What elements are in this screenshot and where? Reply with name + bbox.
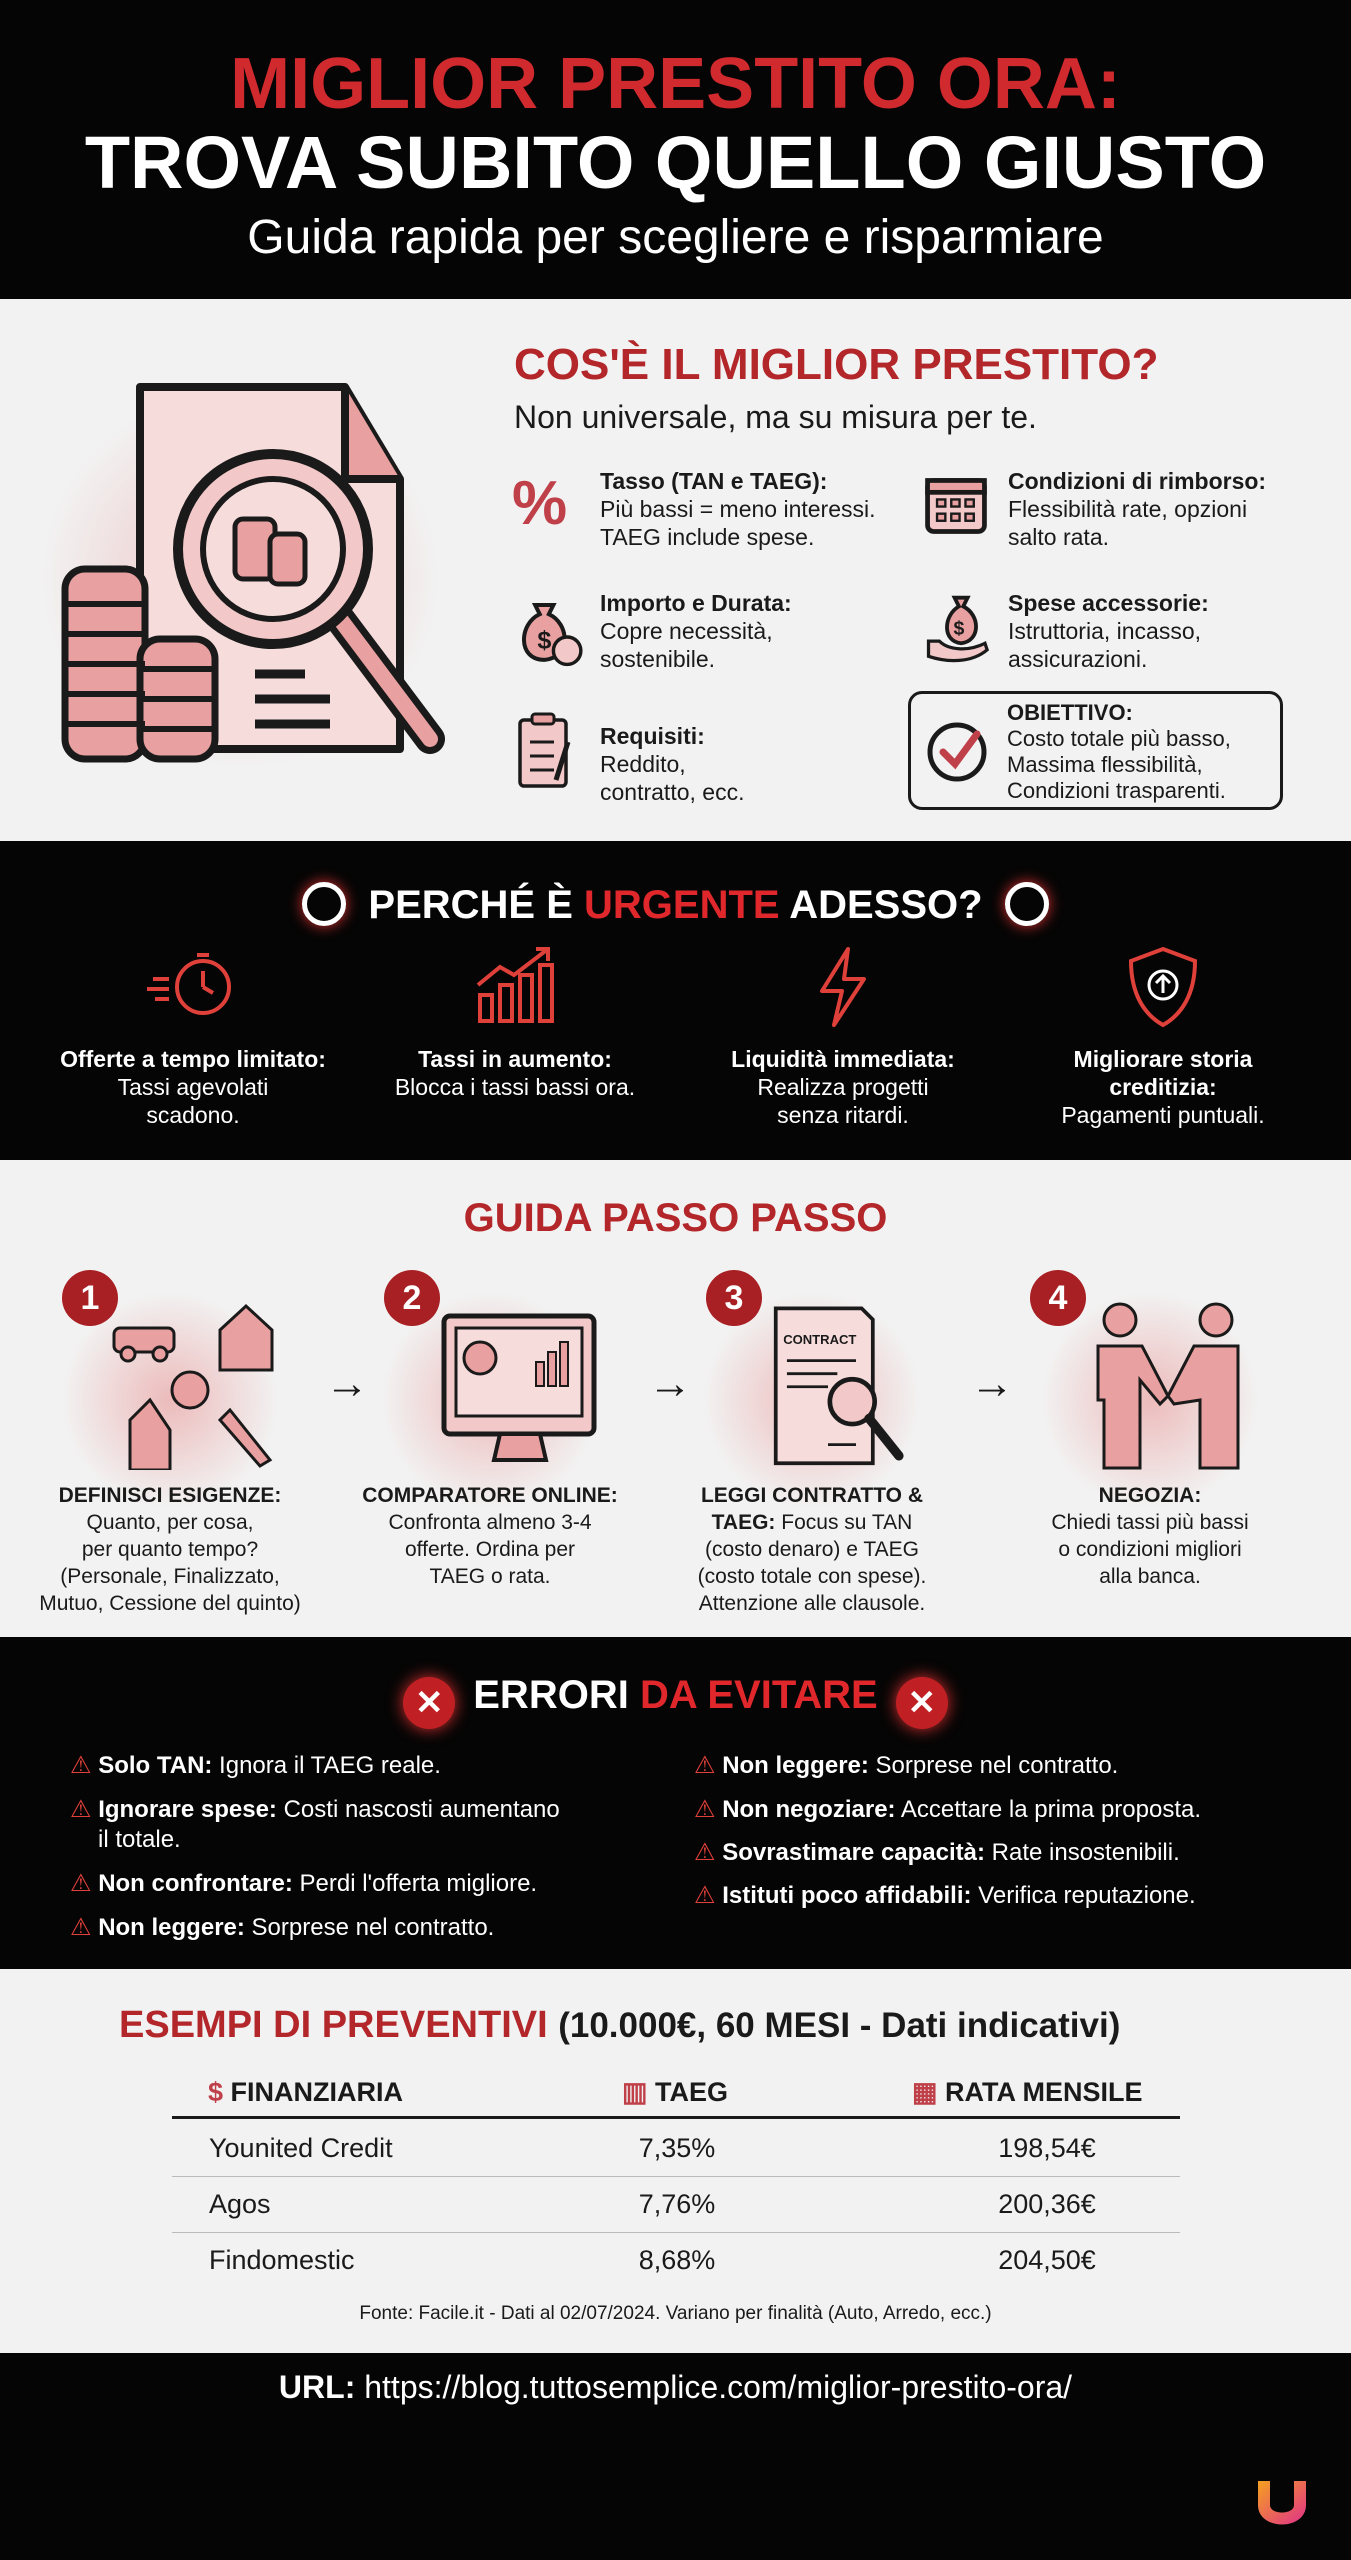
callout: obiettivo — [908, 691, 1283, 810]
step 2: offerte. Ordina per — [405, 1538, 575, 1561]
icon: money bag — [522, 603, 583, 666]
row: agos — [172, 2177, 1180, 2233]
step 2 — [362, 1270, 618, 1588]
step 2: TAEG o rata. — [430, 1565, 550, 1588]
item: condizioni di rimborso: Condizioni di rimborso: — [1008, 468, 1266, 494]
item: tassi in aumento: Blocca i tassi bassi ora. — [395, 1074, 635, 1100]
list: right column: ⚠ Istituti poco affidabili: Verifica reputazione. — [694, 1882, 1196, 1909]
step 3: (costo denaro) e TAEG — [705, 1538, 919, 1561]
list: right column: ⚠ Non leggere: Sorprese nel contratto. — [694, 1752, 1118, 1779]
step 4: Chiedi tassi più bassi — [1051, 1511, 1249, 1534]
callout: obiettivo: OBIETTIVO: — [1007, 700, 1133, 725]
table header — [172, 2069, 1180, 2119]
table header: $ FINANZIARIA — [208, 2077, 403, 2107]
item: spese accessorie: Istruttoria, incasso, — [1008, 618, 1201, 644]
callout: obiettivo: Massima flessibilità, — [1007, 752, 1203, 777]
heading with timer icons: PERCHÉ È URGENTE ADESSO? — [368, 883, 983, 927]
step 4: NEGOZIA: — [1099, 1484, 1201, 1507]
icon: calendar — [925, 478, 987, 534]
callout: obiettivo: Condizioni trasparenti. — [1007, 778, 1226, 803]
item: offerte a tempo limitato — [60, 953, 326, 1128]
step 1: per quanto tempo? — [82, 1538, 258, 1561]
icon: contract with magnifier — [774, 1306, 904, 1466]
icon: car house plane gear — [112, 1304, 274, 1470]
step 2: COMPARATORE ONLINE: — [362, 1484, 618, 1507]
subtitle: Guida rapida per scegliere e risparmiare — [247, 211, 1104, 264]
number badge 1: 1 — [81, 1279, 99, 1317]
number badge 1 — [62, 1270, 118, 1326]
row: younited: 7,35% — [639, 2133, 715, 2163]
list: right column — [694, 1752, 1201, 1909]
number badge 4: 4 — [1049, 1279, 1067, 1317]
item: liquidità immediata: Liquidità immediata: — [731, 1046, 955, 1072]
item: condizioni di rimborso: Flessibilità rate, opzioni — [1008, 496, 1247, 522]
step 3: TAEG: Focus su TAN — [712, 1511, 912, 1534]
item: importo e durata — [522, 590, 792, 672]
arrow 2: → — [648, 1359, 692, 1408]
table header: ▥ TAEG — [622, 2077, 728, 2107]
icon: percent: % — [512, 469, 567, 538]
list: left column: ⚠ Solo TAN: Ignora il TAEG reale. — [70, 1752, 441, 1779]
item: tasso — [512, 468, 876, 550]
item: requisiti: contratto, ecc. — [600, 779, 744, 805]
icon: monitor — [442, 1314, 596, 1462]
list: right column: ⚠ Sovrastimare capacità: Rate insostenibili. — [694, 1839, 1180, 1866]
item: tassi in aumento: Tassi in aumento: — [418, 1046, 612, 1072]
panel: perché è urgente — [0, 841, 1351, 1160]
number badge 3: 3 — [725, 1279, 743, 1317]
item: spese accessorie: assicurazioni. — [1008, 646, 1147, 672]
row: agos: 200,36€ — [998, 2189, 1096, 2219]
list: right column: ⚠ Non negoziare: Accettare la prima proposta. — [694, 1796, 1201, 1823]
footer: url — [0, 2353, 1351, 2560]
item: condizioni di rimborso: salto rata. — [1008, 524, 1109, 550]
heading: COS'È IL MIGLIOR PRESTITO? — [514, 340, 1158, 389]
icon: handshake people — [1096, 1302, 1240, 1470]
step 3: Attenzione alle clausole. — [699, 1592, 925, 1615]
row: younited: Younited Credit — [209, 2133, 393, 2163]
item: spese accessorie — [926, 590, 1209, 672]
item: offerte a tempo limitato: Offerte a tempo limitato: — [60, 1046, 326, 1072]
table header: ▦ RATA MENSILE — [912, 2077, 1143, 2107]
heading: ERRORI DA EVITARE — [473, 1673, 878, 1717]
intro text: Non universale, ma su misura per te. — [514, 399, 1037, 435]
step 1: DEFINISCI ESIGENZE: — [59, 1484, 281, 1507]
row: findomestic — [209, 2245, 1096, 2275]
item: tasso: Tasso (TAN e TAEG): — [600, 468, 827, 494]
step 1: Mutuo, Cessione del quinto) — [39, 1592, 301, 1615]
list: left column: ⚠ Ignorare spese: Costi nascosti aumentano — [70, 1796, 560, 1823]
panel: guida passo passo — [0, 1160, 1351, 1637]
icon: clipboard — [518, 712, 570, 788]
number badge 3 — [706, 1270, 762, 1326]
item: offerte a tempo limitato: scadono. — [146, 1102, 240, 1128]
item: liquidità immediata — [731, 947, 955, 1128]
arrow 3: → — [970, 1359, 1014, 1408]
item: tasso: Più bassi = meno interessi. — [600, 496, 876, 522]
title line 2: TROVA SUBITO QUELLO GIUSTO — [85, 121, 1266, 204]
illustration: document, magnifier and coins — [62, 383, 445, 762]
item: migliorare storia creditizia: Migliorare storia — [1074, 1046, 1252, 1072]
item: requisiti — [518, 712, 744, 805]
row: agos: 7,76% — [639, 2189, 715, 2219]
item: spese accessorie: Spese accessorie: — [1008, 590, 1209, 616]
item: importo e durata: sostenibile. — [600, 646, 715, 672]
list: left column — [70, 1752, 560, 1941]
panel: cos'è il miglior prestito — [0, 299, 1351, 841]
row: younited — [172, 2121, 1180, 2177]
item: migliorare storia creditizia: creditizia: — [1109, 1074, 1217, 1100]
row: findomestic: Findomestic — [209, 2245, 355, 2275]
step 4: alla banca. — [1099, 1565, 1201, 1588]
url text: URL: https://blog.tuttosemplice.com/miglior-prestito-ora/ — [279, 2369, 1072, 2405]
item: migliorare storia creditizia — [1061, 946, 1265, 1128]
item: tasso: TAEG include spese. — [600, 524, 814, 550]
row: findomestic: 204,50€ — [998, 2245, 1096, 2275]
icon: lightning — [820, 947, 866, 1027]
item: liquidità immediata: senza ritardi. — [777, 1102, 909, 1128]
item: importo e durata: Importo e Durata: — [600, 590, 792, 616]
number badge 2: 2 — [403, 1279, 421, 1317]
item: liquidità immediata: Realizza progetti — [757, 1074, 929, 1100]
item: tassi in aumento — [395, 947, 635, 1100]
list: left column: il totale. — [98, 1826, 181, 1853]
step 1: (Personale, Finalizzato, — [60, 1565, 280, 1588]
heading with timer icons — [292, 872, 1060, 936]
header section — [0, 0, 1351, 299]
step 1 — [39, 1270, 301, 1615]
row: younited: 198,54€ — [998, 2133, 1096, 2163]
source note: Fonte: Facile.it - Dati al 02/07/2024. Variano per finalità (Auto, Arredo, ecc.) — [359, 2303, 992, 2324]
heading: ESEMPI DI PREVENTIVI (10.000€, 60 MESI - Dati indicativi) — [119, 2004, 1120, 2046]
icon: rising bars — [476, 947, 554, 1023]
item: requisiti: Reddito, — [600, 751, 686, 777]
arrow 1: → — [325, 1359, 369, 1408]
icon: contract with magnifier: CONTRACT — [783, 1332, 856, 1347]
icon: stopwatch — [147, 953, 231, 1015]
icon: check circle — [928, 722, 986, 782]
list: left column: ⚠ Non leggere: Sorprese nel contratto. — [70, 1914, 494, 1941]
callout: obiettivo: Costo totale più basso, — [1007, 726, 1231, 751]
icon: shield — [1129, 946, 1197, 1028]
number badge 4 — [1030, 1270, 1086, 1326]
item: importo e durata: Copre necessità, — [600, 618, 773, 644]
item: requisiti: Requisiti: — [600, 723, 705, 749]
number badge 2 — [384, 1270, 440, 1326]
logo — [1258, 2481, 1306, 2524]
heading: GUIDA PASSO PASSO — [464, 1196, 887, 1240]
item: condizioni di rimborso — [925, 468, 1266, 550]
step 4: o condizioni migliori — [1058, 1538, 1242, 1561]
step 3 — [698, 1270, 926, 1615]
step 4 — [1030, 1270, 1249, 1588]
icon: hand with bag — [926, 596, 989, 662]
step 1: Quanto, per cosa, — [87, 1511, 253, 1534]
step 3: (costo totale con spese). — [698, 1565, 926, 1588]
heading: ✕ — [907, 1684, 936, 1722]
list: left column: ⚠ Non confrontare: Perdi l'offerta migliore. — [70, 1870, 537, 1897]
title line 1: MIGLIOR PRESTITO ORA: — [230, 44, 1121, 124]
step 2: Confronta almeno 3-4 — [388, 1511, 592, 1534]
row: findomestic: 8,68% — [639, 2245, 715, 2275]
row: agos: Agos — [209, 2189, 271, 2219]
item: offerte a tempo limitato: Tassi agevolati — [118, 1074, 268, 1100]
heading — [390, 1664, 960, 1741]
table — [172, 2077, 1180, 2275]
panel: errori da evitare — [0, 1637, 1351, 1969]
icon: hand with bag: $ — [953, 618, 964, 640]
panel: esempi di preventivi — [0, 1969, 1351, 2353]
icon: money bag: $ — [537, 626, 551, 654]
heading: ✕ — [415, 1684, 444, 1722]
step 3: LEGGI CONTRATTO & — [701, 1484, 923, 1507]
item: migliorare storia creditizia: Pagamenti puntuali. — [1061, 1102, 1265, 1128]
